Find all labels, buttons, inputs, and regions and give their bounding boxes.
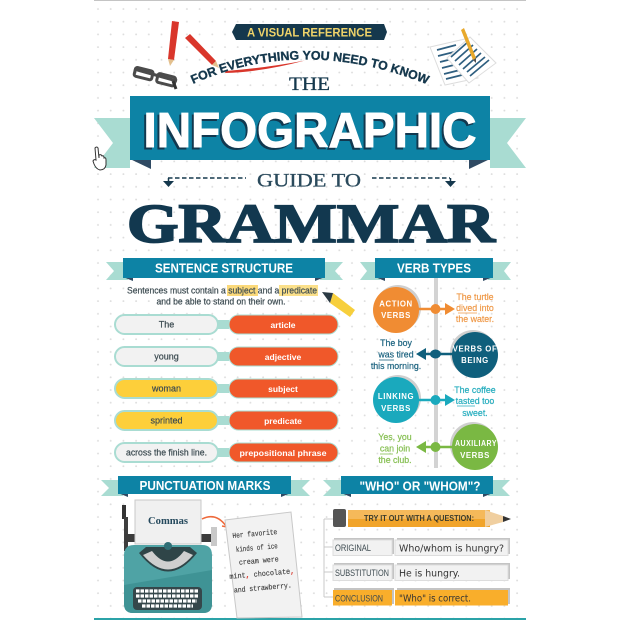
- row: across the finish line / prepositional phrase: [115, 443, 338, 462]
- verb: auxiliary: [378, 422, 498, 470]
- ribbon banner: infographic: INFOGRAPHIC: [142, 106, 474, 160]
- section header: sentence structure: [106, 258, 343, 281]
- row: original: Who/whom is hungry?: [399, 544, 504, 554]
- verb: being: this morning.: [371, 361, 421, 371]
- verb: auxiliary: Yes, you: [378, 432, 412, 442]
- verb: being: VERBS OF: [453, 344, 497, 354]
- verb: auxiliary: can join: [380, 444, 410, 454]
- badge: a visual reference: [232, 24, 387, 40]
- row: young / adjective: adjective: [265, 352, 301, 362]
- icon: typewriter: [122, 500, 217, 613]
- verb: action: ACTION: [379, 300, 413, 308]
- row: woman / subject: [115, 379, 338, 398]
- row: young / adjective: young: [154, 352, 179, 362]
- section header: verb types: VERB TYPES: [397, 260, 471, 276]
- verb: linking: tasted too: [456, 396, 494, 406]
- row: across the finish line / prepositional phrase: across the finish line.: [126, 448, 207, 458]
- row: the / article: The: [159, 320, 174, 330]
- row: woman / subject: woman: [151, 384, 181, 394]
- row: sprinted / predicate: [115, 411, 338, 430]
- section header: who or whom: "WHO" OR "WHOM"?: [360, 478, 481, 494]
- heading: guide to with arrows: [163, 170, 456, 192]
- icon: papers and pencil: [430, 28, 496, 85]
- heading: grammar: GRAMMAR: [127, 193, 497, 254]
- center line: [434, 278, 438, 468]
- note: favorite ice cream: kinds of ice: [236, 543, 278, 555]
- row: sprinted / predicate: sprinted: [150, 416, 183, 426]
- text: sentence rule with highlights: Sentences must contain a subject and a predicate: [127, 286, 317, 296]
- row: sprinted / predicate: predicate: [264, 416, 302, 426]
- panel: who or whom: [323, 476, 511, 606]
- panel: punctuation marks: [101, 476, 310, 618]
- icon: glasses: [134, 67, 177, 89]
- section header: verb types: [360, 258, 511, 281]
- row: original: [333, 538, 510, 556]
- verb: being: BEING: [461, 356, 489, 365]
- icon: red pencils: [168, 21, 219, 68]
- verb: auxiliary: AUXILIARY: [455, 439, 497, 448]
- row: conclusion: [333, 588, 510, 606]
- note: favorite ice cream: and strawberry.: [234, 582, 292, 596]
- verb: being: was tired: [377, 350, 414, 360]
- section header: punctuation marks: PUNCTUATION MARKS: [140, 478, 271, 493]
- text: sentence rule with highlights: and be able to stand on their own.: [156, 296, 286, 306]
- ribbon banner: infographic: INFOGRAPHIC: [144, 104, 476, 158]
- row: conclusion: "Who" is correct.: [399, 594, 471, 604]
- verb: linking: VERBS: [381, 404, 411, 413]
- row: substitution: He is hungry.: [399, 568, 460, 580]
- note: favorite ice cream: cream were: [239, 556, 279, 568]
- curved tagline: FOR EVERYTHING YOU NEED TO KNOW: [190, 50, 430, 84]
- panel: sentence structure: [106, 258, 355, 462]
- poster background: [94, 0, 526, 620]
- icon: typewriter: Commas: [148, 516, 188, 527]
- row: substitution: [333, 563, 510, 580]
- section header: punctuation marks: [101, 476, 310, 497]
- verb: action: The turtle: [456, 292, 494, 302]
- verb: being: [371, 330, 498, 378]
- verb: linking: The coffee: [454, 385, 496, 395]
- heading: the: THE: [289, 74, 330, 95]
- arrow: typewriter to note: [202, 517, 229, 527]
- icon: pencil with prompt: TRY IT OUT WITH A QUESTION:: [364, 514, 474, 523]
- row: young / adjective: [115, 347, 338, 366]
- icon: pencil with prompt: [324, 509, 511, 597]
- verb: auxiliary: the club.: [378, 455, 412, 465]
- verb: action: dived into: [456, 303, 494, 313]
- icon: highlighter: [322, 292, 355, 317]
- row: substitution: SUBSTITUTION: [335, 568, 389, 578]
- note: favorite ice cream: [225, 512, 302, 618]
- heading: guide to with arrows: GUIDE TO: [257, 170, 361, 192]
- verb: action: [373, 285, 494, 333]
- row: across the finish line / prepositional phrase: prepositional phrase: [240, 448, 327, 458]
- verb: linking: LINKING: [378, 392, 414, 401]
- verb: auxiliary: VERBS: [460, 451, 490, 460]
- panel: verb types: [360, 258, 511, 470]
- badge: a visual reference: A VISUAL REFERENCE: [247, 27, 372, 39]
- row: the / article: article: [270, 320, 296, 330]
- verb: action: VERBS: [381, 311, 411, 320]
- note: favorite ice cream: mint, chocolate,: [229, 568, 295, 582]
- row: woman / subject: subject: [268, 384, 298, 394]
- verb: action: the water.: [456, 314, 494, 324]
- section header: sentence structure: SENTENCE STRUCTURE: [155, 260, 293, 276]
- text: sentence rule with highlights: [127, 285, 318, 306]
- row: the / article: [115, 315, 338, 334]
- verb: linking: sweet.: [462, 408, 488, 418]
- verb: being: The boy: [380, 338, 412, 348]
- note: favorite ice cream: Her favorite: [232, 529, 278, 541]
- ribbon banner: infographic: [94, 96, 526, 169]
- row: conclusion: CONCLUSION: [335, 594, 383, 604]
- icon: hand cursor: [93, 147, 106, 170]
- section header: who or whom: [323, 476, 510, 497]
- row: original: ORIGINAL: [335, 543, 371, 553]
- verb: linking: [373, 375, 496, 423]
